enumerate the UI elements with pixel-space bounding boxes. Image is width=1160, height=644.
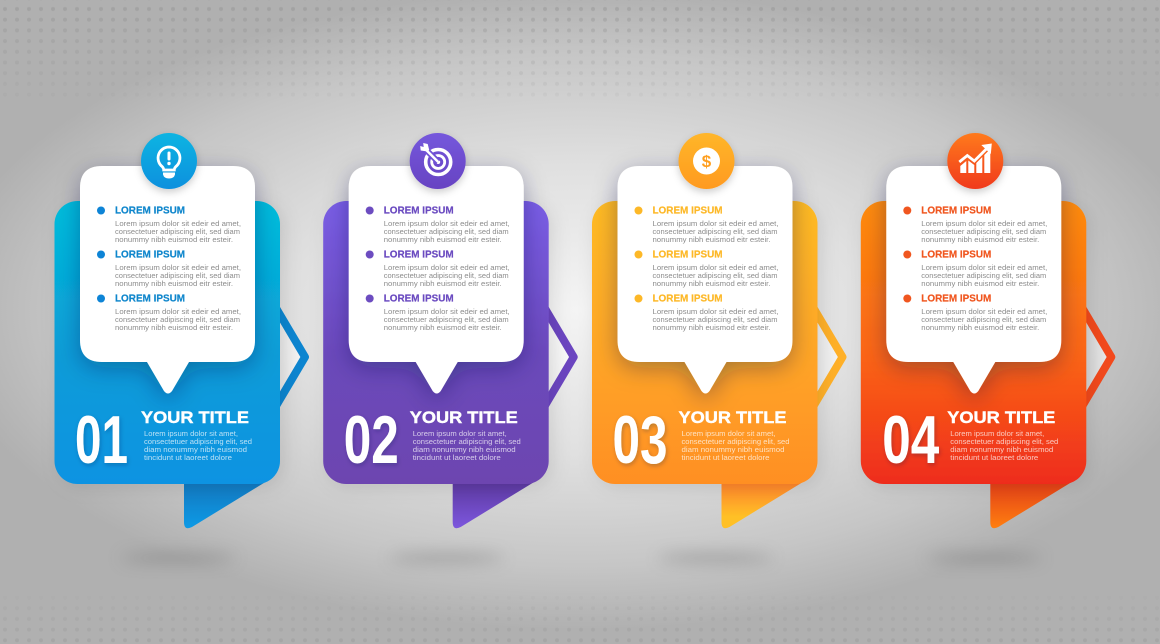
coloured panel 01 (54, 201, 280, 484)
bullet list 01: consectetuer adipiscing elit, sed diam (115, 271, 240, 280)
bullet list 02: Lorem ipsum dolor sit edeir ed amet, (384, 263, 510, 272)
floor shadow 01 (120, 554, 236, 562)
description 03: tincidunt ut laoreet dolore (682, 453, 770, 462)
description 01: consectetuer adipiscing elit, sed (144, 437, 252, 446)
number 01: 01 (75, 402, 128, 478)
bullet list 01: consectetuer adipiscing elit, sed diam (115, 227, 240, 236)
white speech card 04 (886, 166, 1061, 394)
panel: step 04 (861, 133, 1111, 562)
coloured panel 03 (592, 201, 818, 484)
floor shadow 04 (926, 554, 1042, 562)
icon: dollar coin (678, 133, 734, 189)
number 04: 04 (882, 402, 939, 478)
bullet list 04: consectetuer adipiscing elit, sed diam (921, 271, 1046, 280)
bullet list 03: Lorem ipsum dolor sit edeir ed amet, (652, 219, 778, 228)
tail 04 (990, 470, 1078, 528)
description 03 (682, 429, 790, 462)
description 03: Lorem ipsum dolor sit amet, (682, 429, 776, 438)
bullet list 01: nonummy nibh euismod eitr esteir. (115, 235, 233, 244)
bullet list 01: consectetuer adipiscing elit, sed diam (115, 315, 240, 324)
bullet list 03: nonummy nibh euismod eitr esteir. (652, 235, 770, 244)
bullet list 03: LOREM IPSUM (652, 294, 722, 304)
number 02: 02 (344, 402, 399, 478)
description 02: diam nonummy nibh euismod (413, 445, 516, 454)
description 02: consectetuer adipiscing elit, sed (413, 437, 521, 446)
title 01: YOUR TITLE (141, 408, 249, 427)
bullet list 04: nonummy nibh euismod eitr esteir. (921, 323, 1039, 332)
bullet list 03: nonummy nibh euismod eitr esteir. (652, 279, 770, 288)
floor shadow 03 (658, 554, 774, 562)
title 04: YOUR TITLE (947, 408, 1055, 427)
arrow chevron 02 (545, 308, 574, 406)
bullet list 02: consectetuer adipiscing elit, sed diam (384, 227, 509, 236)
icon: target with arrow (410, 133, 466, 189)
white speech card 03 (618, 166, 792, 394)
bullet list 03 (634, 206, 778, 332)
description 01: tincidunt ut laoreet dolore (144, 453, 232, 462)
arrow chevron 04 (1082, 308, 1111, 406)
icon: dollar coin: $ (702, 152, 712, 171)
bullet list 02: nonummy nibh euismod eitr esteir. (384, 279, 502, 288)
bullet list 02: consectetuer adipiscing elit, sed diam (384, 315, 509, 324)
description 04: tincidunt ut laoreet dolore (950, 453, 1038, 462)
bullet list 02: LOREM IPSUM (384, 206, 454, 216)
bullet list 04: nonummy nibh euismod eitr esteir. (921, 235, 1039, 244)
bullet list 04: consectetuer adipiscing elit, sed diam (921, 227, 1046, 236)
bullet list 03: Lorem ipsum dolor sit edeir ed amet, (652, 307, 778, 316)
bullet list 04 (903, 206, 1047, 332)
description 04: diam nonummy nibh euismod (950, 445, 1053, 454)
bullet list 02: LOREM IPSUM (384, 250, 454, 260)
bullet list 02 (366, 206, 510, 332)
bullet list 04: nonummy nibh euismod eitr esteir. (921, 279, 1039, 288)
bullet list 03: consectetuer adipiscing elit, sed diam (652, 227, 778, 236)
description 01: Lorem ipsum dolor sit amet, (144, 429, 238, 438)
white speech card 01 (80, 166, 255, 394)
bullet list 04: Lorem ipsum dolor sit edeir ed amet, (921, 263, 1047, 272)
bullet list 04: Lorem ipsum dolor sit edeir ed amet, (921, 307, 1047, 316)
description 01: diam nonummy nibh euismod (144, 445, 247, 454)
description 02: tincidunt ut laoreet dolore (413, 453, 501, 462)
number 03: 03 (612, 402, 668, 478)
coloured panel 04 (861, 201, 1086, 484)
bullet list 04: LOREM IPSUM (921, 206, 991, 216)
bullet list 02: nonummy nibh euismod eitr esteir. (384, 323, 502, 332)
floor shadow 02 (389, 554, 505, 562)
bullet list 01: LOREM IPSUM (115, 294, 185, 304)
title 03: YOUR TITLE (678, 408, 786, 427)
panel: step 02 (323, 133, 574, 562)
icon: rising bar chart (947, 133, 1003, 189)
description 02: Lorem ipsum dolor sit amet, (413, 429, 507, 438)
description 04: consectetuer adipiscing elit, sed (950, 437, 1058, 446)
title 02: YOUR TITLE (410, 408, 518, 427)
bullet list 03: LOREM IPSUM (652, 206, 722, 216)
bullet list 03: Lorem ipsum dolor sit edeir ed amet, (652, 263, 778, 272)
bullet list 02: Lorem ipsum dolor sit edeir ed amet, (384, 307, 510, 316)
bullet list 03: LOREM IPSUM (652, 250, 722, 260)
bullet list 02: Lorem ipsum dolor sit edeir ed amet, (384, 219, 510, 228)
tail 01 (184, 470, 272, 528)
bullet list 01: nonummy nibh euismod eitr esteir. (115, 279, 233, 288)
description 01 (144, 429, 252, 462)
bullet list 04: LOREM IPSUM (921, 250, 991, 260)
bullet list 02: nonummy nibh euismod eitr esteir. (384, 235, 502, 244)
description 04 (950, 429, 1058, 462)
bullet list 03: consectetuer adipiscing elit, sed diam (652, 315, 778, 324)
bullet list 02: LOREM IPSUM (384, 294, 454, 304)
description 04: Lorem ipsum dolor sit amet, (950, 429, 1044, 438)
tail 03 (722, 470, 810, 528)
bullet list 01: Lorem ipsum dolor sit edeir ed amet, (115, 263, 241, 272)
bullet list 01 (97, 206, 241, 332)
bullet list 01: Lorem ipsum dolor sit edeir ed amet, (115, 219, 241, 228)
tail 02 (453, 470, 541, 528)
bullet list 01: LOREM IPSUM (115, 250, 185, 260)
description 03: diam nonummy nibh euismod (682, 445, 784, 454)
arrow chevron 03 (814, 308, 842, 406)
bullet list 04: Lorem ipsum dolor sit edeir ed amet, (921, 219, 1047, 228)
description 02 (413, 429, 521, 462)
bullet list 02: consectetuer adipiscing elit, sed diam (384, 271, 509, 280)
bullet list 01: LOREM IPSUM (115, 206, 185, 216)
panel: step 03 (592, 133, 842, 562)
bullet list 01: Lorem ipsum dolor sit edeir ed amet, (115, 307, 241, 316)
bullet list 01: nonummy nibh euismod eitr esteir. (115, 323, 233, 332)
bullet list 04: consectetuer adipiscing elit, sed diam (921, 315, 1046, 324)
description 03: consectetuer adipiscing elit, sed (682, 437, 790, 446)
white speech card 02 (349, 166, 524, 394)
bullet list 04: LOREM IPSUM (921, 294, 991, 304)
bullet list 03: nonummy nibh euismod eitr esteir. (652, 323, 770, 332)
panel: step 01 (54, 133, 305, 562)
arrow chevron 01 (276, 308, 305, 406)
icon: light bulb (141, 133, 197, 189)
coloured panel 02 (323, 201, 549, 484)
bullet list 03: consectetuer adipiscing elit, sed diam (652, 271, 778, 280)
